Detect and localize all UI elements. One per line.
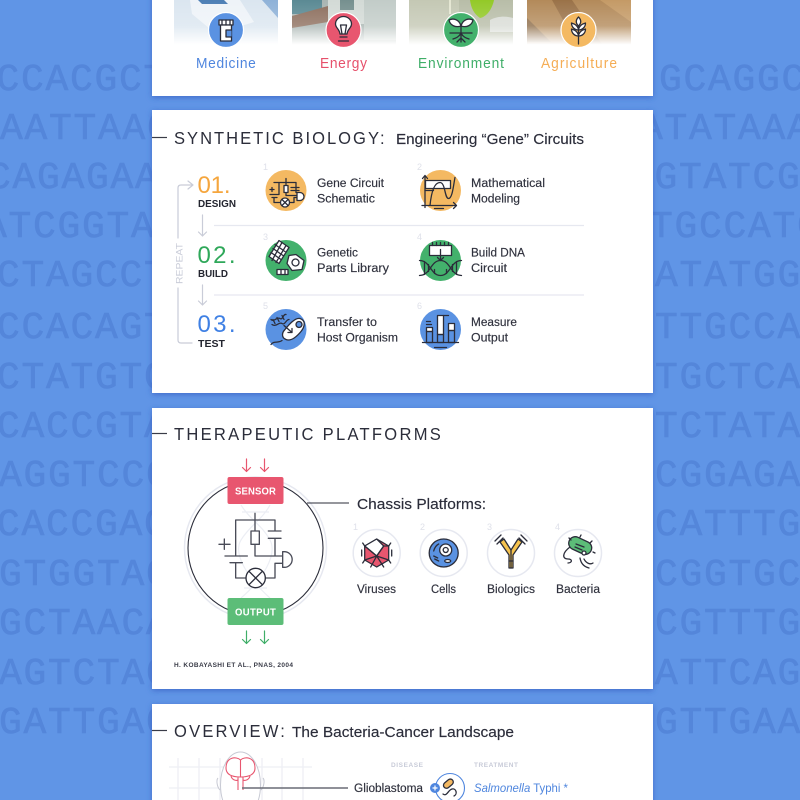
subheading: bacteria-cancer landscape: The Bacteria-Cancer Landscape xyxy=(292,725,514,741)
background: DNA letters: CCACAGT xyxy=(0,307,169,350)
step 01 design: DESIGN xyxy=(198,199,236,210)
panel: synthetic biology xyxy=(152,110,653,393)
item 2: mathematical modeling xyxy=(417,162,545,211)
item 5: transfer to host organism: Transfer to xyxy=(317,317,377,329)
icon: wheat xyxy=(561,12,596,48)
chassis: biologics: Biologics xyxy=(487,584,535,596)
step 03 test: TEST xyxy=(198,339,225,350)
output box: OUTPUT xyxy=(235,607,276,619)
output box xyxy=(228,598,284,625)
heading: therapeutic platforms: THERAPEUTIC PLATFORMS xyxy=(174,423,441,444)
panel: overview xyxy=(152,704,653,800)
chassis: bacteria: 4 xyxy=(555,522,560,532)
item 3: genetic parts library: Genetic xyxy=(317,248,358,260)
chassis: biologics: 3 xyxy=(487,522,492,532)
chassis: bacteria: Bacteria xyxy=(556,584,601,596)
background: DNA letters: GTATCG xyxy=(654,157,800,200)
chassis: cells: 2 xyxy=(420,522,425,532)
background: DNA letters: GTGGTAC xyxy=(0,554,171,597)
subheading: engineering gene circuits: Engineering “Gene” Circuits xyxy=(396,132,584,148)
item 4: build dna circuit: 4 xyxy=(417,232,422,242)
background: DNA letters: GCTAACA xyxy=(0,603,171,646)
step 03 test: 03. xyxy=(198,311,236,338)
item 2: mathematical modeling: 2 xyxy=(417,162,422,172)
background: DNA letters: CACCGAG xyxy=(0,504,169,547)
column label: treatment: TREATMENT xyxy=(474,762,518,769)
item 6: measure output: 6 xyxy=(417,301,422,311)
item 4: build dna circuit xyxy=(417,232,525,281)
heading: synthetic biology: SYNTHETIC BIOLOGY: xyxy=(174,127,385,148)
item 5: transfer to host organism: Host Organism xyxy=(317,332,398,344)
chassis: cells: Cells xyxy=(431,584,456,596)
background: DNA letters: GATTGAC xyxy=(0,702,171,745)
item 6: measure output: Measure xyxy=(471,317,517,329)
row: glioblastoma: Salmonella Typhi * xyxy=(474,781,568,795)
chassis: bacteria xyxy=(554,522,602,596)
label: Medicine: Medicine xyxy=(196,55,256,71)
label: repeat: REPEAT xyxy=(174,243,186,284)
heading: chassis platforms: Chassis Platforms: xyxy=(357,497,486,513)
sensor box: SENSOR xyxy=(235,486,276,498)
chassis: viruses: Viruses xyxy=(357,584,396,596)
heading: overview: OVERVIEW: xyxy=(174,720,285,741)
item 5: transfer to host organism xyxy=(263,301,398,350)
item 1: gene circuit schematic: Gene Circuit xyxy=(317,178,385,190)
chassis: biologics xyxy=(487,522,535,596)
arrows: output xyxy=(242,631,268,644)
item 3: genetic parts library: 3 xyxy=(263,232,268,242)
label: Environment: Environment xyxy=(418,55,504,71)
icon: seedling xyxy=(444,12,478,48)
photo: medicine xyxy=(174,0,278,47)
item 2: mathematical modeling: Mathematical xyxy=(471,178,545,190)
chassis: viruses xyxy=(353,522,400,596)
label: Agriculture: Agriculture xyxy=(541,55,617,71)
step 01 design xyxy=(198,172,236,210)
background: DNA letters: AATTAAC xyxy=(0,108,172,151)
item 6: measure output xyxy=(417,301,517,350)
photo: environment xyxy=(409,0,513,47)
item 3: genetic parts library xyxy=(263,232,389,281)
step 02 build: BUILD xyxy=(198,269,228,280)
background: DNA letters: CTATGTG xyxy=(0,357,169,400)
item 6: measure output: Output xyxy=(471,332,509,344)
panel: applications xyxy=(152,0,653,96)
item 1: gene circuit schematic xyxy=(263,162,385,211)
panel: therapeutic platforms xyxy=(152,408,653,689)
item 1: gene circuit schematic: 1 xyxy=(263,162,268,172)
photo: energy xyxy=(292,0,396,47)
background: DNA letters: CCACGCT xyxy=(0,59,168,102)
row: glioblastoma: Glioblastoma xyxy=(354,783,424,795)
item 1: gene circuit schematic: Schematic xyxy=(317,194,375,206)
icon: medicine bottle xyxy=(208,12,244,48)
diagram: gene circuit in cell xyxy=(184,477,326,619)
step 03 test xyxy=(198,311,236,350)
background: DNA letters: AGTCTAG xyxy=(0,653,171,696)
background: DNA letters: AGGTCCG xyxy=(0,455,171,498)
photo: agriculture xyxy=(527,0,631,47)
chassis: cells xyxy=(420,522,467,596)
column label: disease: DISEASE xyxy=(391,762,424,769)
background: DNA letters: CTAGCCT xyxy=(0,255,169,298)
arrows: sensor input xyxy=(242,459,268,472)
label: Energy: Energy xyxy=(320,55,368,71)
item 5: transfer to host organism: 5 xyxy=(263,301,268,311)
background: DNA letters: CACCGTA xyxy=(0,406,169,449)
citation: H. KOBAYASHI ET AL., PNAS, 2004 xyxy=(174,662,293,669)
icon: head and brain xyxy=(217,752,264,800)
item 4: build dna circuit: Circuit xyxy=(471,263,508,275)
item 2: mathematical modeling: Modeling xyxy=(471,194,520,206)
row: glioblastoma xyxy=(354,774,568,800)
step 02 build: 02. xyxy=(198,242,236,269)
chassis: viruses: 1 xyxy=(353,522,358,532)
repeat loop arrow xyxy=(178,181,206,343)
item 4: build dna circuit: Build DNA xyxy=(471,248,525,260)
item 3: genetic parts library: Parts Library xyxy=(317,263,389,275)
icon: light bulb xyxy=(326,12,361,48)
step 01 design: 01. xyxy=(198,172,230,199)
sensor box xyxy=(228,477,284,504)
